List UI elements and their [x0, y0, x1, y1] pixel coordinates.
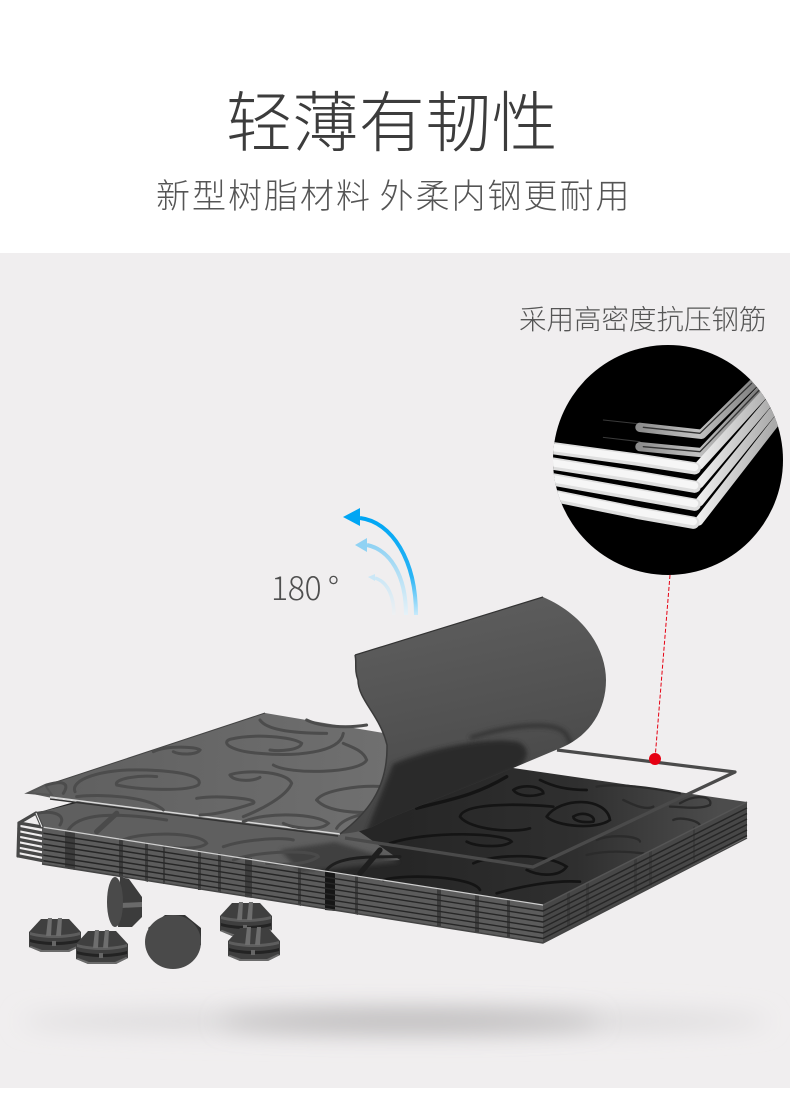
callout label: steel bars: 采用高密度抗压钢筋 [519, 304, 766, 335]
stack top face [36, 740, 747, 905]
magnified detail circle [547, 345, 783, 575]
small arrow [368, 574, 394, 615]
subtitle: 新型树脂材料 外柔内钢更耐用 [156, 178, 631, 216]
wire frame of upper plate [345, 750, 735, 867]
clip seen from side [107, 877, 142, 927]
lower plate stack [18, 740, 747, 943]
white coated bands [547, 395, 777, 523]
floor shadow [20, 1008, 770, 1034]
clip 2 [76, 930, 128, 964]
stack left side face [42, 827, 543, 943]
swirl pattern on lower plate, left side [37, 812, 400, 873]
leader line [655, 575, 670, 759]
leader dot [649, 753, 661, 765]
clip 4 [228, 927, 280, 961]
curled page [340, 597, 606, 835]
stacked wire edges [18, 802, 747, 943]
angle label: 180 ° [271, 564, 339, 610]
upper plate, flat part [28, 713, 395, 836]
clips [29, 877, 280, 969]
clip 3 [220, 902, 272, 936]
bend arrows [343, 508, 416, 615]
large arrow [343, 508, 416, 615]
disc clip [145, 915, 201, 969]
wire glints [603, 420, 640, 442]
stack right side face [543, 802, 747, 943]
product illustration [16, 345, 783, 1046]
panel: grey product background [0, 253, 790, 1088]
swirl pattern on upper plate [47, 720, 383, 828]
upper steel wires [640, 383, 761, 453]
medium arrow [355, 538, 406, 615]
title: 轻薄有韧性 [226, 86, 558, 160]
dark vertical pattern strips on side face [65, 826, 695, 938]
fold shadow [365, 740, 527, 835]
swirl pattern on lower plate [383, 777, 710, 893]
clip 1 [29, 918, 81, 952]
